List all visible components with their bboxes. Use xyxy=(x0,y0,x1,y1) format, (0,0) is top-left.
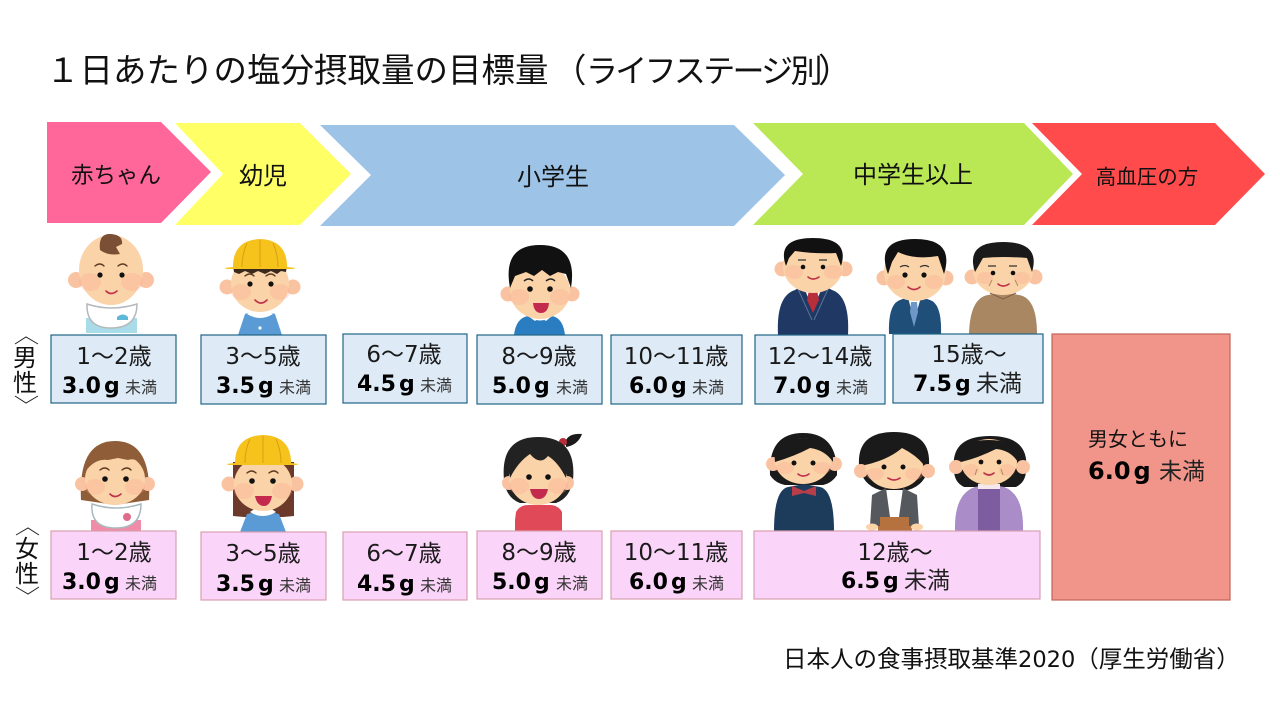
arrow: toddler stage: 幼児 xyxy=(239,156,287,191)
arrow: toddler stage xyxy=(175,123,351,225)
panel: female 12 years and over: 未満 xyxy=(904,561,950,595)
panel: female 10-11 years: 未満 xyxy=(692,570,724,594)
panel: female 8-9 years: 5.0g xyxy=(492,570,550,595)
panel: female 6-7 years xyxy=(343,532,467,600)
panel: male 6-7 years: 6〜7歳 xyxy=(366,342,442,368)
panel: male 8-9 years: 8〜9歳 xyxy=(501,344,577,370)
arrow: hypertension stage: 高血圧の方 xyxy=(1096,160,1198,190)
icon: schoolgirl xyxy=(502,434,582,531)
panel: female 1-2 years: 未満 xyxy=(125,570,157,594)
icon: junior high girl in blazer xyxy=(766,433,842,531)
icon: older man xyxy=(964,242,1042,334)
label: male xyxy=(13,337,38,403)
panel: female 3-5 years: 3.5g xyxy=(216,572,274,597)
panel: female 1-2 years xyxy=(51,531,176,599)
panel: male 6-7 years: 未満 xyxy=(420,372,452,396)
panel: female 3-5 years xyxy=(201,532,326,600)
panel: male 8-9 years: 未満 xyxy=(556,374,588,398)
panel: female 1-2 years: 1〜2歳 xyxy=(76,540,152,566)
panel: male 3-5 years: 3〜5歳 xyxy=(225,344,301,370)
panel: male 8-9 years xyxy=(477,335,602,404)
title: ） xyxy=(818,43,852,92)
panel: female 12 years and over xyxy=(754,531,1040,599)
panel: male 15 years and over xyxy=(893,334,1043,403)
arrow: baby stage: 赤ちゃん xyxy=(71,158,161,190)
icon: baby girl xyxy=(75,441,155,531)
label: female: 性 xyxy=(15,554,39,589)
panel: female 10-11 years xyxy=(611,531,742,599)
panel: male 15 years and over: 未満 xyxy=(976,364,1022,398)
panel: male 3-5 years: 3.5g xyxy=(216,374,274,399)
panel: male 15 years and over: 15歳〜 xyxy=(931,342,1007,368)
panel: female 12 years and over: 12歳〜 xyxy=(857,540,933,566)
panel: hypertension target xyxy=(1052,334,1230,600)
icon: businessman xyxy=(876,239,954,334)
panel: male 12-14 years: 7.0g xyxy=(773,374,831,399)
panel: female 8-9 years: 未満 xyxy=(556,570,588,594)
panel: male 15 years and over: 7.5g xyxy=(913,372,971,397)
label: female xyxy=(15,528,39,594)
icon: junior high boy in blazer xyxy=(774,238,852,335)
panel: female 12 years and over: 6.5g xyxy=(841,569,899,594)
icon: schoolboy xyxy=(500,245,580,335)
panel: male 1-2 years: 3.0g xyxy=(62,374,120,399)
title: （ xyxy=(553,43,586,92)
panel: hypertension target: 男女ともに xyxy=(1088,423,1188,452)
panel: hypertension target: 6.0g xyxy=(1088,457,1151,485)
panel: female 10-11 years: 6.0g xyxy=(629,570,687,595)
panel: male 12-14 years xyxy=(755,335,885,404)
title: ライフステージ別 xyxy=(586,46,820,92)
panel: female 1-2 years: 3.0g xyxy=(62,570,120,595)
arrow: junior high and up stage xyxy=(753,123,1073,225)
panel: female 6-7 years: 未満 xyxy=(420,572,452,596)
source note: 日本人の食事摂取基準2020（厚生労働省） xyxy=(783,640,1240,674)
panel: male 8-9 years: 5.0g xyxy=(492,374,550,399)
arrow: baby stage xyxy=(47,122,211,223)
panel: female 3-5 years: 3〜5歳 xyxy=(225,541,301,567)
icon: kindergarten girl xyxy=(222,435,304,532)
panel: male 12-14 years: 未満 xyxy=(836,374,868,398)
panel: male 3-5 years: 未満 xyxy=(279,374,311,398)
panel: male 10-11 years: 10〜11歳 xyxy=(624,344,728,370)
panel: male 1-2 years: 1〜2歳 xyxy=(76,344,152,370)
panel: female 10-11 years: 10〜11歳 xyxy=(624,540,728,566)
arrow: junior high and up stage: 中学生以上 xyxy=(853,155,973,190)
icon: older woman xyxy=(949,436,1030,531)
arrow: hypertension stage xyxy=(1032,123,1265,225)
panel: female 8-9 years: 8〜9歳 xyxy=(501,540,577,566)
panel: male 3-5 years xyxy=(201,335,326,404)
label: female: 女 xyxy=(15,529,39,564)
panel: male 6-7 years xyxy=(343,334,467,403)
panel: female 8-9 years xyxy=(477,531,602,599)
panel: male 10-11 years: 6.0g xyxy=(629,374,687,399)
arrow: elementary stage: 小学生 xyxy=(517,157,589,192)
panel: male 6-7 years: 4.5g xyxy=(357,372,415,397)
panel: female 6-7 years: 4.5g xyxy=(357,572,415,597)
label: male: 性 xyxy=(13,363,37,398)
icon: adult woman xyxy=(854,432,935,531)
panel: male 1-2 years: 未満 xyxy=(125,374,157,398)
panel: male 1-2 years xyxy=(51,335,176,403)
label: male: 男 xyxy=(13,338,37,373)
arrow: elementary stage xyxy=(320,125,785,226)
icon: kindergarten boy xyxy=(220,239,300,335)
panel: hypertension target: 未満 xyxy=(1159,452,1205,486)
panel: female 6-7 years: 6〜7歳 xyxy=(366,541,442,567)
icon: baby boy xyxy=(68,234,154,333)
panel: female 3-5 years: 未満 xyxy=(279,572,311,596)
panel: male 12-14 years: 12〜14歳 xyxy=(768,344,872,370)
title: １日あたりの塩分摂取量の目標量 xyxy=(46,43,548,92)
panel: male 10-11 years xyxy=(611,335,742,404)
panel: male 10-11 years: 未満 xyxy=(692,374,724,398)
